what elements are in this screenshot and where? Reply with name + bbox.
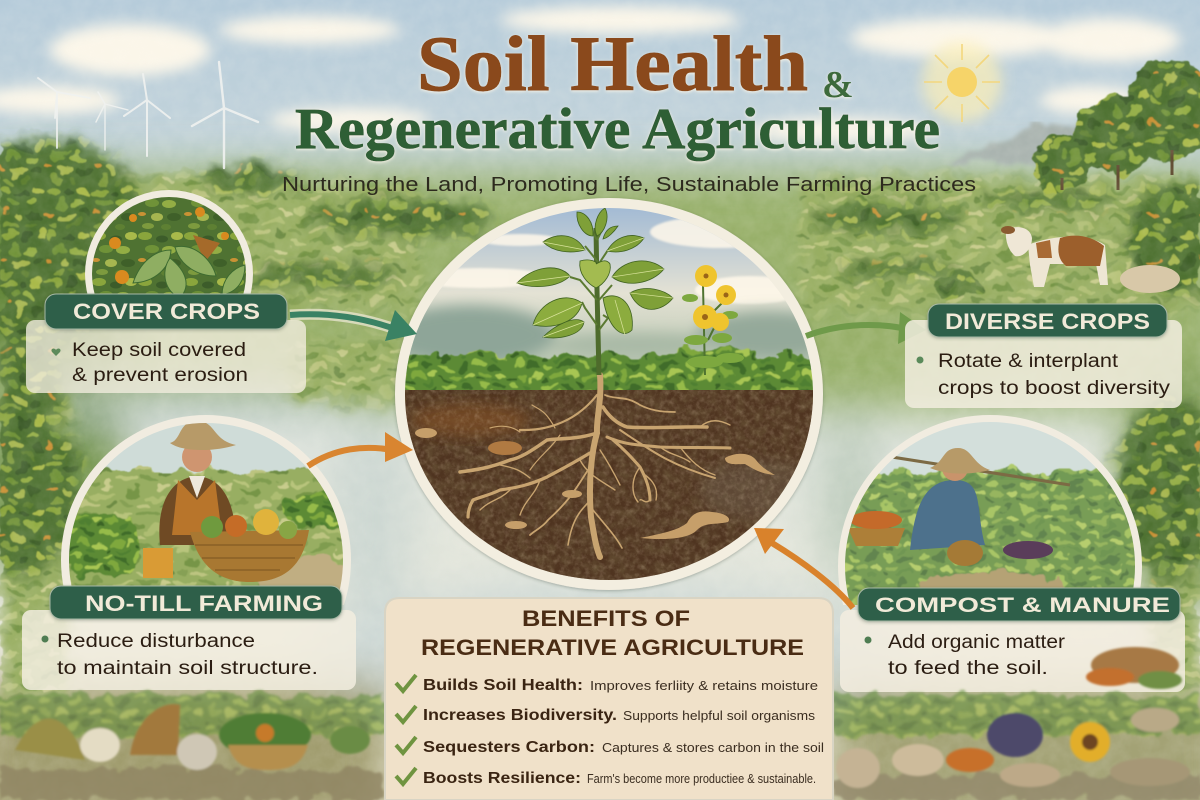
plant stem and leaves [517, 208, 673, 375]
cover crops text panel: Keep soil covered [72, 340, 246, 361]
no-till label: NO-TILL FARMING [85, 591, 323, 616]
no-till text panel: Reduce disturbance [57, 631, 255, 652]
panel: compost and manure [838, 415, 1185, 692]
produce and stones foreground right [835, 695, 1200, 800]
cover crops label: COVER CROPS [73, 299, 260, 324]
wind turbines [38, 62, 258, 168]
soil organisms [415, 428, 775, 539]
benefit: sequesters carbon [396, 737, 824, 756]
cover crops picture [85, 190, 253, 294]
diverse crops label: DIVERSE CROPS [945, 309, 1150, 334]
panel: diverse crops [905, 304, 1182, 408]
no-till farmer picture [61, 415, 351, 605]
no-till text panel [22, 610, 356, 690]
cow and sheep [1001, 226, 1180, 293]
benefit: sequesters carbon: Sequesters Carbon: [423, 739, 595, 756]
cover crops text panel: & prevent erosion [72, 365, 248, 386]
benefits heading: REGENERATIVE AGRICULTURE [421, 635, 804, 660]
title [295, 20, 940, 161]
no-till label [50, 586, 342, 619]
arrow: cover crops to centre [290, 310, 417, 341]
sun [922, 42, 1002, 122]
benefit: increases biodiversity [396, 706, 816, 724]
panel: no-till farming [22, 415, 370, 705]
title: Soil Health [417, 20, 808, 107]
cover crops label [45, 294, 287, 329]
compost label [858, 588, 1180, 621]
sunflowers [682, 265, 744, 375]
benefit: boosts resilience: Boosts Resilience: [423, 770, 581, 787]
central circle: plant and soil cross-section [385, 198, 845, 590]
benefit: boosts resilience: Farm's become more productiee & sustainable. [587, 771, 816, 786]
benefit: builds soil health [396, 675, 818, 694]
produce and stones foreground left [0, 695, 385, 800]
diverse crops text panel [905, 320, 1182, 408]
cover crops text panel [26, 320, 306, 393]
benefit: builds soil health: Improves ferliity & retains moisture [590, 678, 818, 693]
benefit: increases biodiversity: Supports helpful soil organisms [623, 708, 816, 723]
benefits heading: BENEFITS OF [522, 606, 690, 631]
diverse crops label [928, 304, 1167, 337]
panel: benefits of regenerative agriculture [385, 598, 833, 800]
plant roots [460, 375, 730, 557]
diverse crops text panel: crops to boost diversity [938, 378, 1171, 399]
no-till text panel: to maintain soil structure. [57, 658, 318, 679]
benefit: builds soil health: Builds Soil Health: [423, 677, 583, 694]
benefit: increases biodiversity: Increases Biodiversity. [423, 707, 617, 724]
diverse crops text panel: Rotate & interplant [938, 351, 1119, 372]
arrow: compost to centre [754, 528, 853, 608]
compost text panel: Add organic matter [888, 632, 1066, 653]
benefit: boosts resilience [396, 768, 816, 787]
arrow: no-till to centre [308, 432, 413, 466]
panel: cover crops [26, 190, 306, 393]
benefit: sequesters carbon: Captures & stores carbon in the soil [602, 740, 824, 755]
arrow: centre to diverse crops [806, 312, 926, 344]
compost text panel: to feed the soil. [888, 658, 1048, 679]
compost label: COMPOST & MANURE [875, 594, 1170, 617]
compost farmer picture [838, 415, 1142, 605]
subtitle: Nurturing the Land, Promoting Life, Sustainable Farming Practices [282, 174, 976, 196]
title: Regenerative Agriculture [295, 96, 940, 161]
title: & [822, 64, 854, 106]
compost text panel [840, 610, 1185, 692]
benefits heading [421, 606, 804, 660]
